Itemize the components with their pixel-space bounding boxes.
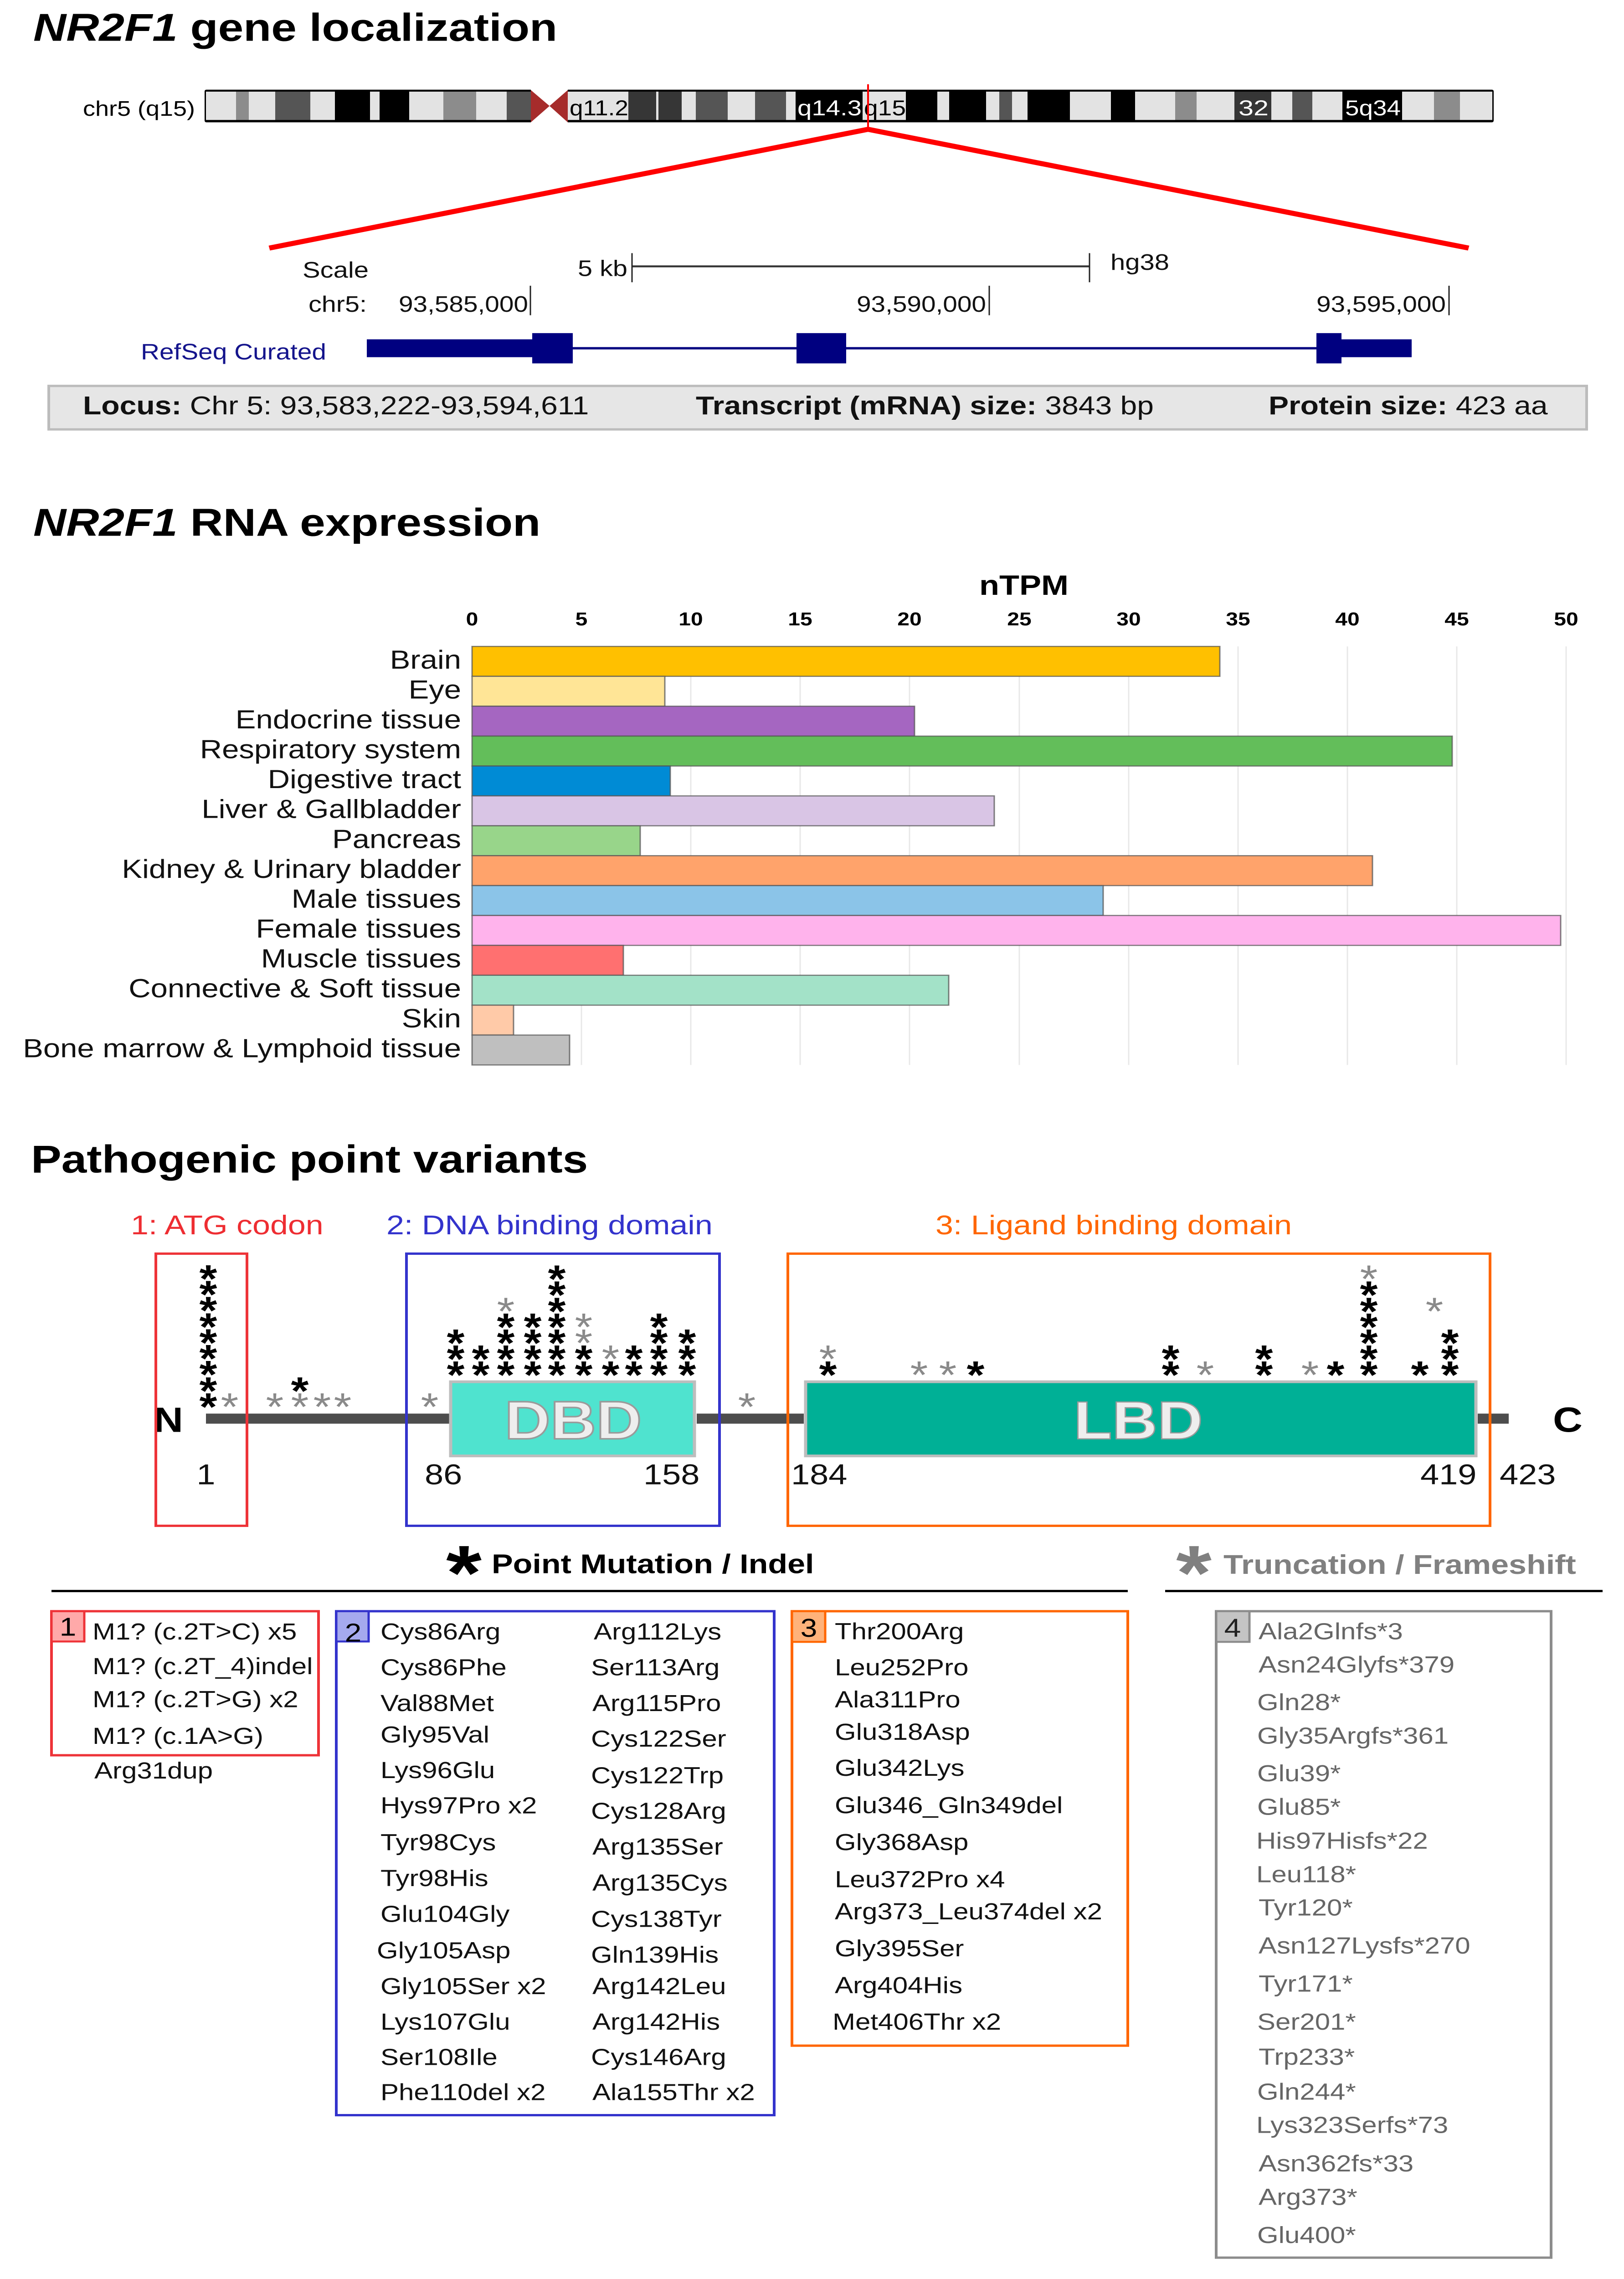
variant markers: point mutations: * — [575, 1353, 593, 1397]
variant markers: point mutations: * — [200, 1369, 217, 1413]
axis tick labels: 15 — [788, 609, 812, 629]
genomic coordinates: chr5: — [308, 292, 367, 317]
variant markers: point mutations: * — [497, 1305, 515, 1349]
variant list 4: Gln244* — [1257, 2079, 1356, 2104]
tissue labels: Liver & Gallbladder — [201, 795, 461, 824]
variant markers: point mutations: * — [200, 1289, 217, 1332]
badge 1 — [51, 1611, 84, 1641]
tissue labels — [23, 645, 461, 1063]
variant markers: point mutations: * — [1255, 1337, 1273, 1381]
variant markers: point mutations: * — [524, 1353, 542, 1397]
variant markers: point mutations: * — [447, 1321, 465, 1365]
legend: truncation / frameshift: Truncation / Frameshift — [1223, 1549, 1576, 1580]
badge 1: 1 — [60, 1613, 76, 1641]
variant markers: point mutations: * — [200, 1273, 217, 1316]
variant list 2, second column: Arg142His — [592, 2009, 720, 2035]
variant markers: point mutations: * — [548, 1305, 566, 1349]
residue position labels: 419 — [1420, 1459, 1476, 1490]
variant markers: point mutations: * — [524, 1337, 542, 1381]
domain heading: ATG codon: 1: ATG codon — [131, 1210, 324, 1240]
variant list 4: Tyr171* — [1259, 1971, 1353, 1997]
variant list 3: Leu372Pro x4 — [835, 1867, 1005, 1892]
variant markers: truncation and frameshift: * — [910, 1353, 928, 1397]
variant list 2, first column: Ser108Ile — [380, 2044, 498, 2070]
variant markers: truncation and frameshift: * — [291, 1385, 308, 1428]
genomic coordinates: 93,585,000 — [399, 292, 528, 317]
panel 2: DNA binding domain variants — [336, 1611, 774, 2115]
variant list 2, second column: Cys128Arg — [591, 1798, 726, 1824]
axis tick labels — [466, 609, 1578, 629]
variant markers: point mutations: * — [650, 1353, 668, 1397]
info bar: Locus: Chr 5: 93,583,222-93,594,611 — [83, 391, 589, 420]
variant markers: point mutations: * — [497, 1337, 515, 1381]
variant markers: point mutations — [200, 1257, 1459, 1428]
legend: truncation / frameshift — [1165, 1530, 1603, 1616]
chromosome ideogram: q15 — [864, 96, 906, 120]
variant list 3: Gly395Ser — [835, 1935, 964, 1961]
variant markers: point mutations: * — [200, 1257, 217, 1300]
legend: truncation / frameshift: * — [1176, 1530, 1212, 1616]
domain heading: ligand binding domain: 3: Ligand binding domain — [935, 1210, 1292, 1240]
chromosome ideogram — [205, 88, 1494, 124]
variant list 2, second column: Gln139His — [591, 1942, 719, 1968]
axis tick labels: 40 — [1335, 609, 1360, 629]
variant markers: truncation and frameshift: * — [575, 1305, 592, 1349]
variant markers: truncation and frameshift: * — [602, 1337, 619, 1381]
variant markers: point mutations: * — [1360, 1337, 1378, 1381]
variant markers: point mutations: * — [548, 1337, 566, 1381]
variant markers: truncation and frameshift — [221, 1258, 1443, 1428]
terminus labels: C — [1553, 1400, 1583, 1439]
variant list 3: Gly368Asp — [835, 1829, 968, 1855]
axis tick labels: 25 — [1007, 609, 1032, 629]
variant markers: point mutations: * — [200, 1353, 217, 1396]
variant list 3: Glu346_Gln349del — [835, 1792, 1063, 1818]
info bar: Protein size: 423 aa — [1269, 391, 1548, 420]
variant list 3: Glu342Lys — [835, 1755, 965, 1781]
variant list 2, second column: Arg135Cys — [592, 1870, 728, 1896]
variant markers: truncation and frameshift: * — [1197, 1353, 1214, 1397]
variant list 4: Lys323Serfs*73 — [1256, 2112, 1448, 2138]
tissue labels: Muscle tissues — [261, 944, 461, 973]
chromosome ideogram: q14.3 — [797, 96, 862, 120]
variant markers: point mutations: * — [548, 1289, 566, 1333]
variant list 4: Asn362fs*33 — [1259, 2150, 1413, 2176]
variant list 2, second column: Ala155Thr x2 — [592, 2079, 755, 2105]
chromosome ideogram: 32 — [1239, 96, 1269, 120]
zoom marker: red position line and expansion lines — [269, 84, 1469, 248]
variant list 2, second column: Arg135Ser — [592, 1834, 723, 1860]
panel 1: ATG codon variants — [51, 1611, 319, 1784]
variant list 1: M1? (c.1A>G) — [93, 1723, 263, 1749]
variant markers: point mutations: * — [200, 1337, 217, 1381]
genome browser scale — [303, 250, 1169, 283]
axis tick labels: 50 — [1554, 609, 1578, 629]
variant list 4: Glu400* — [1257, 2222, 1356, 2248]
tissue labels: Respiratory system — [200, 735, 461, 764]
residue position labels: 1 — [196, 1459, 216, 1490]
chromosome ideogram: 5q34 — [1345, 96, 1401, 120]
variant markers: point mutations: * — [1360, 1353, 1378, 1397]
domain: LBD — [806, 1382, 1476, 1456]
variant markers: point mutations: * — [575, 1337, 593, 1381]
variant markers: point mutations: * — [497, 1353, 515, 1397]
variant list 2, first column: Cys86Phe — [380, 1655, 507, 1680]
variant list 2, second column: Cys138Tyr — [591, 1906, 722, 1932]
variant list 2, first column: Lys96Glu — [380, 1757, 495, 1783]
variant list 2, first column: Hys97Pro x2 — [380, 1793, 537, 1819]
variant list 2, first column: Lys107Glu — [380, 2009, 510, 2035]
variant markers: point mutations: * — [1441, 1353, 1459, 1397]
variant markers: point mutations: * — [524, 1321, 542, 1365]
variant list 4: Glu39* — [1257, 1760, 1341, 1786]
variant markers: truncation and frameshift: * — [334, 1385, 351, 1428]
variant list 2, first column: Gly105Ser x2 — [380, 1973, 546, 1999]
legend: point mutation / indel: * — [446, 1530, 482, 1616]
badge 4: 4 — [1224, 1614, 1241, 1642]
variant markers: truncation and frameshift: * — [421, 1385, 438, 1428]
legend: point mutation / indel: Point Mutation / Indel — [492, 1548, 814, 1579]
variant markers: point mutations: * — [678, 1337, 696, 1381]
panel 4: truncation and frameshift variants — [1216, 1611, 1551, 2258]
variant markers: truncation and frameshift: * — [266, 1385, 283, 1428]
variant list 2, second column: Cys146Arg — [591, 2044, 726, 2070]
variant list 4 — [1256, 1618, 1470, 2248]
variant list 3: Arg404His — [835, 1972, 962, 1998]
variant markers: truncation and frameshift: * — [738, 1385, 755, 1428]
variant markers: point mutations: * — [548, 1353, 566, 1397]
variant list 2, second column: Arg112Lys — [594, 1619, 721, 1645]
title: pathogenic point variants: Pathogenic point variants — [31, 1137, 588, 1181]
residue position labels: 423 — [1500, 1459, 1556, 1490]
residue position labels: 158 — [643, 1459, 699, 1490]
bars — [472, 646, 1561, 1065]
tissue labels: Male tissues — [292, 885, 461, 913]
terminus labels: N — [154, 1400, 183, 1439]
variant list 2, second column: Arg115Pro — [592, 1690, 721, 1716]
badge 3: 3 — [801, 1614, 817, 1642]
variant list 4: His97Hisfs*22 — [1256, 1828, 1428, 1854]
tissue labels: Digestive tract — [268, 765, 461, 794]
variant list 3: Leu252Pro — [835, 1655, 969, 1680]
badge 3 — [792, 1611, 825, 1642]
variant markers: point mutations: * — [548, 1258, 566, 1301]
variant markers: point mutations: * — [1360, 1321, 1378, 1365]
variant markers: point mutations: * — [548, 1273, 566, 1317]
variant list 4: Gly35Argfs*361 — [1257, 1723, 1449, 1748]
variant markers: point mutations: * — [1360, 1273, 1378, 1317]
variant markers: point mutations: * — [967, 1353, 985, 1397]
variant list 2, first column: Gly105Asp — [377, 1938, 510, 1963]
variant markers: point mutations: * — [1441, 1321, 1459, 1365]
variant list 4: Gln28* — [1257, 1689, 1341, 1715]
axis tick labels: 45 — [1444, 609, 1469, 629]
axis title: nTPM — [979, 570, 1069, 601]
variant markers: truncation and frameshift: * — [1301, 1353, 1319, 1397]
axis tick labels: 0 — [466, 609, 478, 629]
tissue labels: Brain — [390, 645, 461, 675]
domain: DBD: DBD — [504, 1390, 642, 1450]
variant list 2, second column: Ser113Arg — [591, 1655, 719, 1680]
variant markers: point mutations: * — [650, 1337, 668, 1381]
variant list 3 — [833, 1618, 1102, 2035]
tissue labels: Skin — [402, 1004, 461, 1033]
domain: DBD — [451, 1382, 694, 1456]
variant markers: point mutations: * — [1162, 1337, 1180, 1381]
residue position labels: 86 — [425, 1459, 462, 1490]
variant list 4: Ser201* — [1257, 2009, 1356, 2035]
variant markers: point mutations: * — [548, 1321, 566, 1365]
chromosome label: chr5 (q15) — [83, 97, 195, 120]
variant markers: point mutations: * — [1411, 1353, 1429, 1397]
variant list 4: Asn24Glyfs*379 — [1259, 1652, 1454, 1678]
variant markers: point mutations: * — [1360, 1289, 1378, 1333]
variant markers: point mutations: * — [497, 1321, 515, 1365]
tissue labels: Female tissues — [256, 915, 461, 944]
axis tick labels: 35 — [1226, 609, 1250, 629]
axis tick labels: 10 — [678, 609, 703, 629]
region box: DNA binding domain — [406, 1253, 719, 1526]
variant markers: point mutations: * — [1255, 1353, 1273, 1397]
RefSeq track label: RefSeq Curated — [141, 340, 326, 365]
variant markers: point mutations: * — [650, 1305, 668, 1349]
variant markers: point mutations: * — [678, 1321, 696, 1365]
variant list 3: Thr200Arg — [835, 1618, 964, 1644]
variant markers: truncation and frameshift: * — [1426, 1289, 1443, 1333]
variant markers: truncation and frameshift: * — [939, 1353, 956, 1397]
variant markers: point mutations: * — [1441, 1337, 1459, 1381]
variant markers: truncation and frameshift: * — [819, 1337, 837, 1381]
variant markers: point mutations: * — [625, 1337, 643, 1381]
genomic coordinates: 93,595,000 — [1316, 292, 1446, 317]
axis tick labels: 5 — [576, 609, 587, 629]
variant list 4: Arg373* — [1259, 2184, 1357, 2210]
variant list 2, first column: Phe110del x2 — [380, 2079, 545, 2105]
badge 2 — [336, 1611, 369, 1647]
variant list 2, first column: Glu104Gly — [380, 1901, 510, 1927]
variant markers: point mutations: * — [1162, 1353, 1180, 1397]
variant markers: truncation and frameshift: * — [221, 1385, 238, 1428]
variant list 1: Arg31dup — [94, 1758, 213, 1784]
variant markers: truncation and frameshift: * — [313, 1385, 331, 1428]
domain: LBD: LBD — [1074, 1391, 1203, 1450]
badge 4 — [1216, 1611, 1249, 1642]
title: gene localization: NR2F1 gene localization — [33, 5, 557, 49]
variant markers: truncation and frameshift: * — [497, 1289, 514, 1333]
variant markers: point mutations: * — [291, 1369, 309, 1413]
tissue labels: Kidney & Urinary bladder — [122, 855, 461, 884]
axis tick labels: 30 — [1116, 609, 1141, 629]
legend: point mutation / indel — [51, 1530, 1128, 1616]
info bar: Transcript (mRNA) size: 3843 bp — [696, 391, 1154, 420]
variant markers: point mutations: * — [1360, 1305, 1378, 1349]
axis tick labels: 20 — [897, 609, 922, 629]
variant list 4: Glu85* — [1257, 1794, 1341, 1820]
residue position labels: 184 — [791, 1459, 847, 1490]
bar chart: nTPM by tissue — [23, 570, 1578, 1065]
variant markers: point mutations: * — [472, 1353, 490, 1397]
variant list 3: Met406Thr x2 — [833, 2009, 1001, 2035]
variant list 2, first column: Tyr98His — [380, 1865, 488, 1891]
variant list 2, second column — [591, 1619, 755, 2105]
variant markers: truncation and frameshift: * — [575, 1321, 592, 1365]
tissue labels: Endocrine tissue — [236, 706, 461, 734]
variant list 1: M1? (c.2T>G) x2 — [93, 1686, 298, 1712]
variant markers: point mutations: * — [447, 1337, 465, 1381]
variant markers: point mutations: * — [650, 1321, 668, 1365]
variant list 4: Ala2Glnfs*3 — [1259, 1618, 1403, 1644]
chromosome ideogram: q11.2 — [570, 96, 628, 120]
variant list 1: M1? (c.2T_4)indel — [93, 1653, 313, 1679]
variant list 3: Glu318Asp — [835, 1719, 970, 1745]
genomic coordinates — [308, 286, 1449, 317]
variant list 3: Arg373_Leu374del x2 — [835, 1898, 1102, 1924]
variant markers: point mutations: * — [819, 1353, 837, 1397]
panel 3: ligand binding domain variants — [792, 1611, 1128, 2046]
variant markers: point mutations: * — [1327, 1353, 1345, 1397]
variant list 1: M1? (c.2T>C) x5 — [93, 1619, 297, 1645]
genomic coordinates: 93,590,000 — [857, 292, 986, 317]
region box: ATG codon — [156, 1253, 247, 1526]
tissue labels: Eye — [409, 675, 461, 704]
variant list 3: Ala311Pro — [835, 1686, 961, 1712]
tissue labels: Connective & Soft tissue — [128, 975, 461, 1003]
variant list 2, first column: Val88Met — [380, 1690, 494, 1716]
genome browser scale: hg38 — [1110, 250, 1169, 275]
genome browser scale: Scale — [303, 258, 369, 283]
variant list 2, first column: Cys86Arg — [380, 1619, 500, 1645]
variant markers: point mutations: * — [678, 1353, 696, 1397]
variant markers: point mutations: * — [472, 1337, 490, 1381]
variant markers: point mutations: * — [625, 1353, 643, 1397]
variant markers: point mutations: * — [447, 1353, 465, 1397]
variant markers: point mutations: * — [200, 1321, 217, 1365]
genome browser scale: 5 kb — [578, 256, 627, 281]
variant list 4: Trp233* — [1259, 2044, 1355, 2070]
variant markers: point mutations: * — [602, 1353, 620, 1397]
variant list 2, second column: Arg142Leu — [592, 1973, 726, 1999]
title: RNA expression: NR2F1 RNA expression — [33, 500, 540, 544]
variant markers: point mutations: * — [200, 1385, 217, 1428]
variant list 2, first column — [377, 1619, 546, 2105]
tissue labels: Bone marrow & Lymphoid tissue — [23, 1034, 461, 1063]
badge 2: 2 — [345, 1619, 361, 1647]
variant markers: point mutations: * — [200, 1305, 217, 1349]
protein backbone — [206, 1413, 1509, 1424]
variant list 2, second column: Cys122Ser — [591, 1726, 726, 1752]
tissue labels: Pancreas — [332, 825, 461, 854]
variant list 2, first column: Gly95Val — [380, 1722, 489, 1748]
variant list 4: Asn127Lysfs*270 — [1259, 1933, 1470, 1959]
variant list 2, first column: Tyr98Cys — [380, 1830, 496, 1856]
gene model — [367, 333, 1412, 363]
region box: ligand binding domain — [788, 1253, 1490, 1526]
variant markers: point mutations: * — [524, 1305, 542, 1349]
variant list 2, second column: Cys122Trp — [591, 1762, 724, 1788]
variant list 1 — [93, 1619, 313, 1784]
info bar — [49, 386, 1587, 429]
variant list 4: Tyr120* — [1259, 1895, 1353, 1921]
variant list 4: Leu118* — [1256, 1861, 1356, 1887]
domain heading: DNA binding domain: 2: DNA binding domain — [386, 1210, 713, 1240]
terminus labels — [154, 1400, 1583, 1439]
variant markers: truncation and frameshift: * — [1360, 1258, 1377, 1301]
residue position labels — [196, 1459, 1556, 1490]
